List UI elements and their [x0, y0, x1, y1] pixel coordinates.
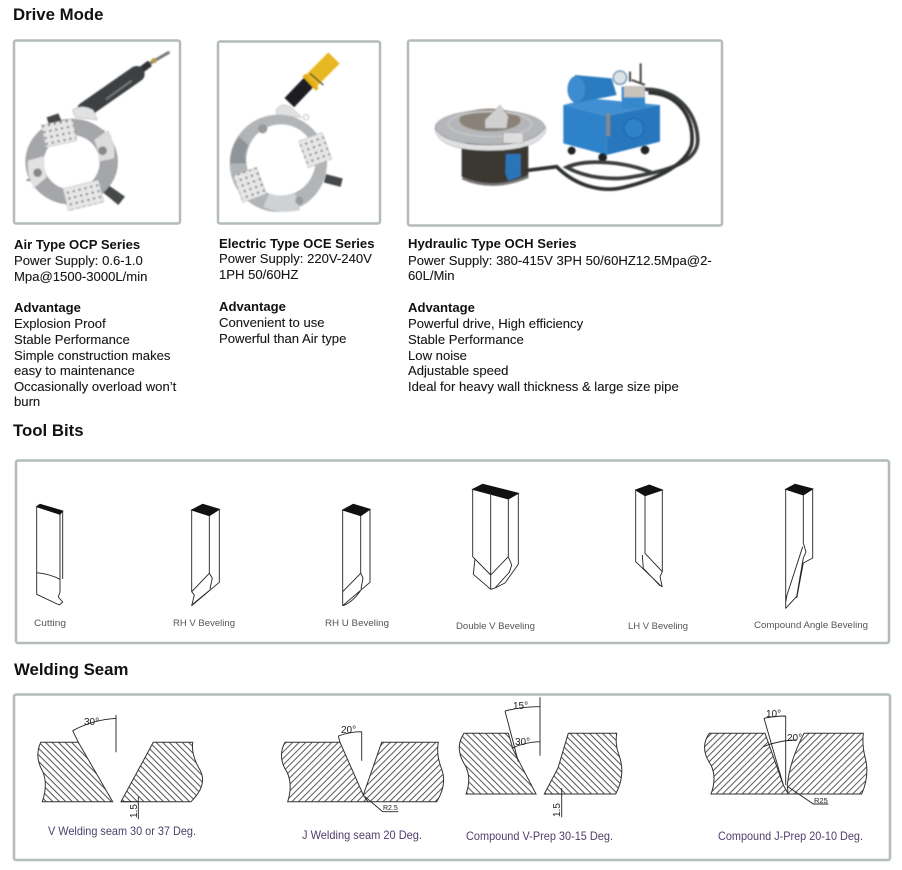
diagram: V welding seam [38, 715, 203, 838]
tool: double V beveling: Double V Beveling [456, 621, 535, 631]
tool: LH V beveling: LH V Beveling [628, 621, 688, 631]
text block: hydraulic type: Powerful drive, High efficiency [408, 316, 584, 331]
text block: electric type: Power Supply: 220V-240V [219, 251, 372, 266]
text block: air type: Power Supply: 0.6-1.0 [14, 253, 143, 268]
icon: hydraulic beveling machine [435, 63, 698, 189]
tool: LH V beveling [628, 485, 688, 631]
diagram: J welding seam [281, 725, 444, 842]
text block: air type: Advantage [14, 300, 81, 315]
text block: air type: Mpa@1500-3000L/min [14, 269, 147, 284]
diagram: V welding seam: 1.5 [129, 804, 140, 818]
tool: compound angle beveling [754, 484, 868, 630]
diagram: compound J prep: 10° [766, 709, 781, 720]
icon: air beveling machine [26, 53, 168, 211]
diagram: compound J prep: R25 [814, 796, 828, 805]
text block: electric type: Advantage [219, 299, 286, 314]
text block: hydraulic type: Adjustable speed [408, 363, 508, 378]
text block: air type: Simple construction makes [14, 348, 171, 363]
text block: air type [14, 237, 177, 409]
text block: air type: Stable Performance [14, 332, 130, 347]
text block: air type: Air Type OCP Series [14, 237, 140, 252]
diagram: J welding seam: J Welding seam 20 Deg. [302, 828, 422, 842]
tool: cutting [34, 504, 66, 628]
text block: air type: easy to maintenance [14, 363, 135, 378]
text block: electric type [219, 236, 375, 346]
heading: Drive Mode: Drive Mode [13, 5, 103, 24]
tool: RH V beveling [173, 504, 235, 628]
tool: RH U beveling: RH U Beveling [325, 618, 389, 628]
text block: hydraulic type: Ideal for heavy wall thickness & large size pipe [408, 379, 679, 394]
tool: double V beveling [456, 484, 535, 631]
diagram: J welding seam: 20° [341, 725, 356, 736]
diagram: compound J prep [705, 709, 867, 843]
panel: electric type photo [218, 42, 380, 224]
text block: hydraulic type: Low noise [408, 348, 467, 363]
tool: RH U beveling [325, 504, 389, 628]
diagram: compound V prep: 30° [515, 737, 530, 748]
diagram: J welding seam: R2.5 [383, 805, 398, 812]
text block: electric type: Powerful than Air type [219, 331, 346, 346]
diagram: compound V prep [459, 697, 622, 843]
text block: hydraulic type: Power Supply: 380-415V 3PH 50/60HZ12.5Mpa@2- [408, 253, 712, 268]
text block: hydraulic type: Stable Performance [408, 332, 524, 347]
text block: air type: Explosion Proof [14, 316, 106, 331]
heading: Tool Bits: Tool Bits [13, 421, 84, 440]
tool: compound angle beveling: Compound Angle Beveling [754, 620, 868, 630]
diagram: V welding seam: 30° [84, 717, 99, 728]
diagram: compound V prep: 1.5 [552, 803, 563, 817]
text block: electric type: Electric Type OCE Series [219, 236, 375, 251]
text block: hydraulic type: Hydraulic Type OCH Series [408, 236, 577, 251]
diagram: compound J prep: Compound J-Prep 20-10 Deg. [718, 829, 863, 843]
panel: hydraulic type photo [408, 40, 722, 226]
diagram: compound V prep: 15° [513, 701, 528, 712]
text block: electric type: 1PH 50/60HZ [219, 267, 298, 282]
heading: Welding Seam: Welding Seam [14, 660, 128, 679]
tool: cutting: Cutting [34, 618, 66, 628]
panel: tool bits [16, 460, 889, 643]
tool: RH V beveling: RH V Beveling [173, 618, 235, 628]
text block: electric type: Convenient to use [219, 315, 325, 330]
panel: air type photo [14, 40, 180, 224]
text block: air type: burn [14, 394, 40, 409]
diagram: V welding seam: V Welding seam 30 or 37 Deg. [48, 824, 196, 838]
panel: welding seam [14, 694, 890, 860]
text block: hydraulic type: 60L/Min [408, 268, 455, 283]
text block: air type: Occasionally overload won’t [14, 379, 177, 394]
diagram: compound V prep: Compound V-Prep 30-15 Deg. [466, 829, 613, 843]
icon: electric beveling machine [230, 58, 342, 212]
text block: hydraulic type: Advantage [408, 300, 475, 315]
diagram: compound J prep: 20° [787, 733, 802, 744]
text block: hydraulic type [408, 236, 712, 394]
